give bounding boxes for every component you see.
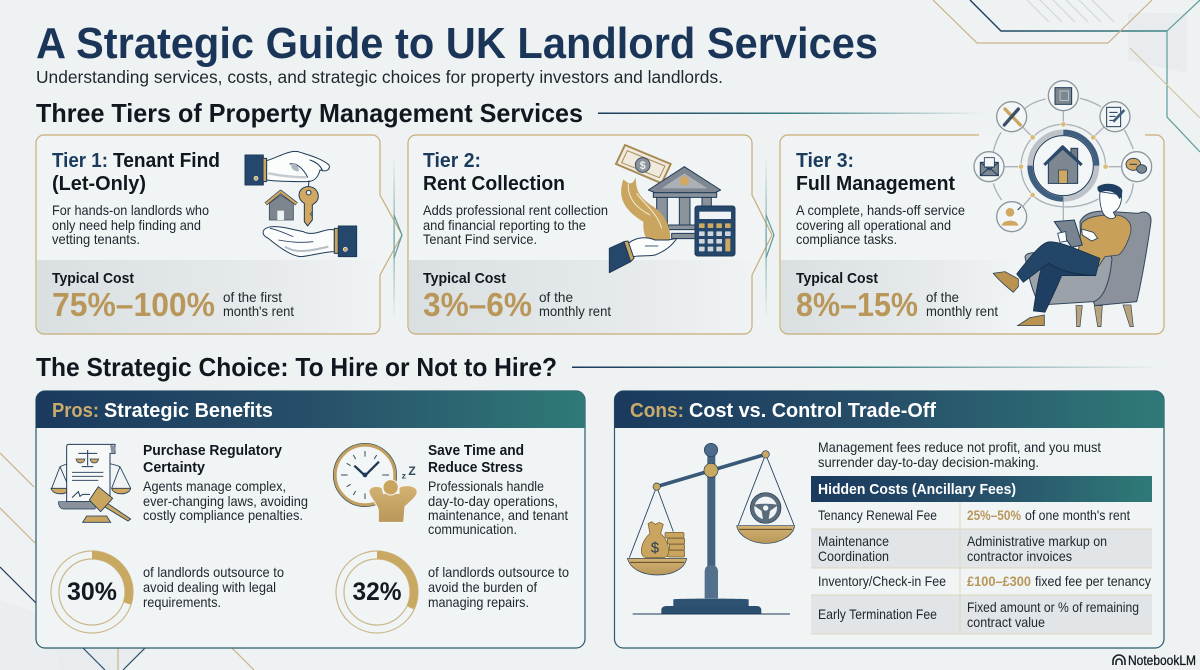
heading: strategic choice: The Strategic Choice: To Hire or Not to Hire? bbox=[36, 352, 557, 382]
row: maintenance coordination: Maintenance bbox=[818, 533, 889, 549]
stat text: 30% bbox=[143, 564, 284, 610]
cons header bbox=[614, 391, 1164, 428]
benefit: regulatory certainty: Certainty bbox=[143, 460, 205, 476]
tier 2 cost bbox=[423, 270, 611, 323]
row: early termination bbox=[818, 599, 1139, 630]
row: inventory check-in: fixed fee per tenancy bbox=[1035, 573, 1151, 589]
tier 2 heading: Rent Collection bbox=[423, 172, 565, 195]
panel: tier 2 bbox=[408, 135, 774, 334]
tier 1 cost: 75%–100% bbox=[52, 286, 215, 323]
benefit: regulatory certainty: Purchase Regulatory bbox=[143, 443, 282, 459]
benefit: regulatory certainty: Agents manage complex, bbox=[143, 478, 286, 494]
tier 1 cost: month's rent bbox=[223, 303, 294, 319]
panel: cons bbox=[614, 391, 1164, 648]
row: tenancy renewal: of one month's rent bbox=[1025, 507, 1130, 523]
tier 2 description: Tenant Find service. bbox=[423, 231, 537, 247]
tier 3 cost: 8%–15% bbox=[796, 286, 918, 323]
tier 3 cost: monthly rent bbox=[926, 303, 998, 319]
row: tenancy renewal bbox=[818, 507, 1130, 523]
stat text: 32%: managing repairs. bbox=[428, 594, 529, 610]
benefit: regulatory certainty: ever-changing laws, avoiding bbox=[143, 493, 308, 509]
icon: clock and relaxed person: z bbox=[402, 471, 407, 481]
tier 2 cost: Typical Cost bbox=[423, 270, 506, 287]
donut chart: 32% bbox=[336, 551, 418, 633]
benefit: regulatory certainty: costly compliance penalties. bbox=[143, 507, 303, 523]
tier 1 cost bbox=[52, 270, 294, 323]
row: inventory check-in: Inventory/Check-in Fee bbox=[818, 573, 946, 589]
tier 1 heading: Tier 1: bbox=[52, 149, 108, 172]
table: hidden costs: Hidden Costs (Ancillary Fees) bbox=[818, 481, 1016, 498]
pros header: Strategic Benefits bbox=[104, 400, 273, 422]
panel: tier 3 bbox=[780, 81, 1164, 334]
tier 1 description: For hands-on landlords who bbox=[52, 202, 209, 218]
tier 2 heading: Tier 2: bbox=[423, 149, 481, 172]
benefit: save time: Professionals handle bbox=[428, 478, 544, 494]
donut chart: 32%: 32% bbox=[352, 578, 402, 606]
cons summary: Management fees reduce not profit, and you must bbox=[818, 439, 1101, 455]
row: maintenance coordination: contractor invoices bbox=[967, 548, 1072, 564]
tier 3 description bbox=[796, 202, 965, 247]
row: maintenance coordination: Coordination bbox=[818, 548, 889, 564]
tier 1 heading bbox=[52, 149, 220, 195]
tier 2 icon: bank, money and calculator bbox=[609, 145, 735, 273]
tier 1 heading: (Let-Only) bbox=[52, 172, 146, 195]
tier 3 description: A complete, hands-off service bbox=[796, 202, 965, 218]
tier 2 description bbox=[423, 202, 608, 247]
icon: balance scale with money and steering wheel: $ bbox=[651, 540, 659, 556]
benefit: regulatory certainty bbox=[143, 443, 308, 523]
row: tenancy renewal: Tenancy Renewal Fee bbox=[818, 507, 937, 523]
tier 1 cost: Typical Cost bbox=[52, 270, 134, 287]
tier 2 icon: bank, money and calculator: $ bbox=[640, 160, 646, 172]
row: maintenance coordination bbox=[818, 533, 1107, 564]
tier 1 heading: Tenant Find bbox=[113, 149, 220, 172]
stat text: 30%: avoid dealing with legal bbox=[143, 579, 276, 595]
stat text: 32%: avoid the burden of bbox=[428, 579, 537, 595]
tier 2 cost: of the bbox=[539, 289, 573, 305]
benefit: save time: communication. bbox=[428, 521, 517, 537]
row: maintenance coordination: Administrative markup on bbox=[967, 533, 1107, 549]
stat text: 30%: of landlords outsource to bbox=[143, 564, 284, 580]
cons summary: surrender day-to-day decision-making. bbox=[818, 454, 1039, 470]
tier 2 description: Adds professional rent collection bbox=[423, 202, 608, 218]
tier 3 description: compliance tasks. bbox=[796, 231, 897, 247]
donut chart: 30%: 30% bbox=[67, 578, 117, 606]
row: early termination: contract value bbox=[967, 614, 1045, 630]
tier 3 cost: of the bbox=[926, 289, 959, 305]
cons summary bbox=[818, 439, 1101, 470]
icon: balance scale with money and steering wheel bbox=[627, 443, 795, 614]
tier 2 description: and financial reporting to the bbox=[423, 217, 586, 233]
benefit: save time: Reduce Stress bbox=[428, 460, 523, 476]
benefit: save time: day-to-day operations, bbox=[428, 493, 558, 509]
benefit: save time: maintenance, and tenant bbox=[428, 507, 568, 523]
donut chart: 30% bbox=[51, 551, 133, 633]
stat text: 30%: requirements. bbox=[143, 594, 221, 610]
tier 2 heading bbox=[423, 149, 565, 195]
row: inventory check-in bbox=[818, 573, 1151, 589]
row: inventory check-in: £100–£300 bbox=[967, 573, 1031, 589]
icon: clock and relaxed person: Z bbox=[408, 464, 416, 478]
tier 1 cost: of the first bbox=[223, 289, 282, 305]
row: early termination: Fixed amount or % of remaining bbox=[967, 599, 1139, 615]
row: tenancy renewal: 25%–50% bbox=[967, 507, 1021, 523]
icon: clock and relaxed person bbox=[333, 443, 417, 522]
subtitle: Understanding services, costs, and strategic choices for property investors and landlords. bbox=[36, 67, 723, 87]
cons header: Cost vs. Control Trade-Off bbox=[689, 400, 936, 422]
tier 3 heading: Tier 3: bbox=[796, 149, 854, 172]
tier 2 cost: 3%–6% bbox=[423, 286, 532, 323]
title: A Strategic Guide to UK Landlord Services bbox=[36, 19, 878, 68]
stat text: 32%: of landlords outsource to bbox=[428, 564, 569, 580]
benefit: save time: Save Time and bbox=[428, 443, 524, 459]
icon: legal document, scales and gavel bbox=[51, 444, 131, 522]
table: hidden costs bbox=[811, 476, 1152, 634]
tier 3 cost bbox=[796, 270, 998, 323]
cons header: Cons: bbox=[630, 400, 684, 422]
tier 3 heading bbox=[796, 149, 955, 195]
heading: three tiers: Three Tiers of Property Management Services bbox=[36, 98, 583, 128]
panel: tier 1 bbox=[36, 135, 402, 334]
panel: pros bbox=[36, 391, 585, 648]
stat text: 32% bbox=[428, 564, 569, 610]
tier 3 icon: service hub and seated landlord bbox=[974, 81, 1152, 327]
tier 3 cost: Typical Cost bbox=[796, 270, 878, 287]
tier 1 description: vetting tenants. bbox=[52, 231, 140, 247]
tier 3 description: covering all operational and bbox=[796, 217, 951, 233]
tier 3 heading: Full Management bbox=[796, 172, 955, 195]
pros header: Pros: bbox=[52, 400, 99, 422]
row: early termination: Early Termination Fee bbox=[818, 606, 937, 622]
benefit: save time bbox=[428, 443, 568, 537]
pros header bbox=[36, 391, 585, 428]
tier 1 description bbox=[52, 202, 209, 247]
tier 1 icon: hands passing key and house bbox=[245, 151, 357, 257]
tier 1 description: only need help finding and bbox=[52, 217, 201, 233]
tier 2 cost: monthly rent bbox=[539, 303, 611, 319]
